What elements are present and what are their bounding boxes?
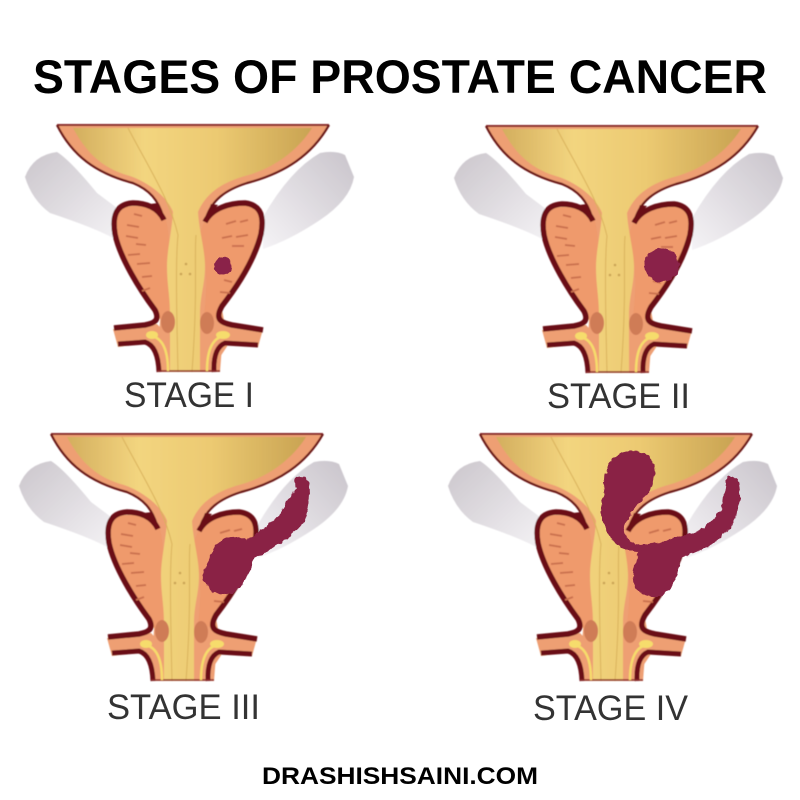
- label: stage I: STAGE I: [124, 376, 254, 415]
- tumor: stage III: [205, 478, 309, 595]
- label: stage III: STAGE III: [107, 688, 260, 727]
- label: stage IV: STAGE IV: [533, 689, 689, 728]
- tumor: stage IV: [602, 453, 738, 595]
- prostate diagram: stage I: [25, 125, 354, 372]
- tumor: stage II: [645, 248, 679, 282]
- footer website: DRASHISHSAINI.COM: [262, 763, 538, 790]
- panel: stage III: [19, 434, 348, 727]
- label: stage II: STAGE II: [547, 377, 690, 416]
- prostate diagram: stage III: [19, 434, 348, 681]
- prostate diagram: stage II: [454, 126, 783, 373]
- panel: stage I: [25, 125, 354, 415]
- tumor: stage I: [214, 257, 232, 275]
- panel: stage II: [454, 126, 783, 416]
- prostate diagram: stage IV: [448, 434, 777, 681]
- title: STAGES OF PROSTATE CANCER: [33, 50, 767, 103]
- panel: stage IV: [448, 434, 777, 728]
